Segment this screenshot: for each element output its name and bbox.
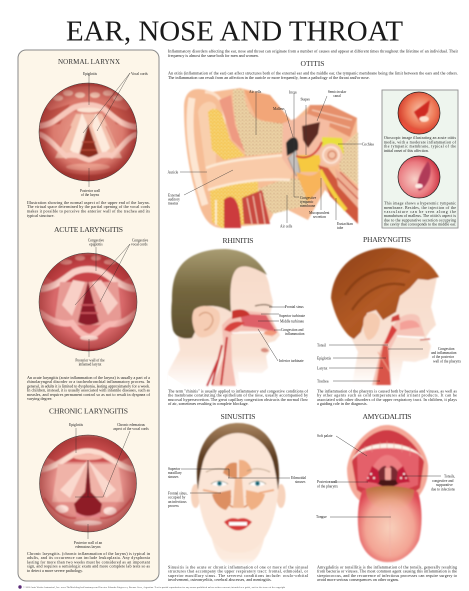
text: rhinitis: [168, 388, 309, 407]
text: pharyngitis: associated with other disorders of the upper respiratory tract. In children, it plays: [317, 397, 457, 403]
illustration: ear anatomy: Incus: [289, 90, 297, 94]
heading: rhinitis: RHINITIS: [222, 236, 254, 245]
text: hyperemic membrane image: [384, 202, 456, 227]
illustration: sinusitis face: sinuses: [295, 480, 306, 484]
illustration: mouth and tongue: Posterior wall: [317, 480, 337, 484]
footer copyright: © 2010 Amir Works Anatomical, Inc. www.TheModelingAndAnatomy.com Director: Eduardo Puigcerver, Buenos Aires, Argentina. Text in partial reproduction for any means prohibited unless written consent; intended as a guide, not for the teaser of the copyright: [23, 586, 285, 589]
text: chronic laryngitis: sign, and requires a semiologic exam and more complete lab tests so as: [27, 564, 150, 570]
illustration: acute laryngitis: [39, 238, 149, 366]
text: amygdalitis: from bacteria or viruses. The most common agent causing this inflammation is the: [317, 569, 457, 574]
illustration: acute laryngitis: epiglottis: [89, 242, 103, 246]
illustration: ear anatomy: Air cells: [280, 224, 293, 228]
text: rhinitis: mucosal hypersecretion. The great capillary congestion obstructs the normal flow: [168, 397, 308, 402]
fat: [208, 109, 245, 160]
eyes: [212, 481, 227, 486]
heading: pharyngitis: PHARYNGITIS: [363, 235, 411, 244]
text: amygdalitis: Amygdalitis or tonsillitis is the inflammation of the tonsils, generally resulting: [317, 564, 457, 570]
illustration: rhinitis head: Superior turbinate: [279, 314, 305, 318]
illustration: ear anatomy: [168, 88, 374, 230]
text: sinusitis: structures that accompany the upper respiratory tract: frontal, ethmoidal, or: [168, 569, 309, 575]
illustration: acute laryngitis: Congestive: [88, 238, 104, 242]
text: acute otitis image: [384, 136, 457, 153]
text: rhinitis: the membrane constituting the epithelium of the nose, usually accompanied by: [168, 393, 309, 399]
illustration: sinusitis face: process: [168, 504, 179, 508]
illustration: mouth and tongue: suppurative: [436, 483, 453, 487]
illustration: mouth and tongue: congestive and: [432, 479, 454, 483]
frontal sinuses: [223, 463, 237, 479]
text: hyperemic membrane image: This image shows a hyperemic tympanic: [384, 202, 456, 206]
illustration: sinusitis face: Frontal sinus,: [168, 492, 188, 496]
illustration: ear anatomy: meatus: [168, 202, 179, 206]
illustration: ear anatomy: External: [168, 194, 180, 198]
eustachian tube: [318, 165, 358, 224]
text: sinusitis: involvement, osteomyelitis, cerebral abscesses, and meningitis.: [168, 577, 272, 583]
illustration: sinusitis face: Superior: [168, 467, 181, 471]
illustration: chronic laryngitis: Chronic edematous: [117, 423, 146, 427]
illustration: mouth and tongue: [316, 425, 456, 562]
heading: acute laryngitis: ACUTE LARYNGITIS: [54, 225, 123, 234]
illustration: normal larynx: of the larynx: [81, 193, 99, 197]
cochlea: [320, 144, 342, 166]
leader lines: [180, 93, 362, 223]
illustration: ear anatomy: tube: [337, 226, 344, 230]
ear canal: [206, 155, 294, 190]
illustration: mouth and tongue: due to infections: [431, 487, 456, 491]
illustration: ear anatomy: Air cells: [249, 90, 262, 94]
panel: otoscopic images: [382, 90, 458, 228]
text: pharyngitis: [317, 388, 457, 406]
text: acute laryngitis: rhinolaryngeal disorder or a tracheobronchial inflammatory process. In: [27, 379, 150, 384]
illustration: mouth and tongue: Soft palate: [317, 434, 333, 438]
text: amygdalitis: avoid more serious consequences on other organs.: [317, 577, 399, 582]
text: otitis: The inflammation can result from an affection in the auricle or more frequently, from a pathology of the throat and/or nose.: [168, 75, 370, 81]
panel: laryngitis: [18, 50, 159, 581]
middle ear: [282, 114, 330, 178]
text: normal larynx: Illustration showing the normal aspect of the upper end of the larynx.: [27, 200, 150, 205]
text: acute laryngitis: varying degree.: [27, 396, 52, 401]
illustration: acute laryngitis: inflamed larynx: [79, 362, 102, 366]
title: EAR, NOSE AND THROAT: [66, 16, 403, 48]
illustration: ear anatomy: membrane: [300, 204, 316, 208]
illustration: ear anatomy: secretion: [313, 215, 326, 219]
illustration: acute laryngitis: vocal cords: [131, 242, 148, 246]
illustration: normal larynx: Epiglottis: [83, 72, 98, 76]
illustration: pharyngitis head: and inflammation: [431, 351, 457, 355]
text: hyperemic membrane image: manubrium of malleus. The otitis's aspect is: [384, 214, 456, 218]
illustration: sinusitis face: maxillary: [168, 471, 182, 475]
lips: [347, 425, 428, 506]
illustration: pharyngitis head: Larynx: [317, 366, 328, 370]
text: hyperemic membrane image: membrane. Besides, the injection of the: [384, 206, 456, 211]
text: pharyngitis: The inflammation of the pharynx is caused both by bacteria and viruses, as well as: [317, 388, 457, 394]
illustration: acute laryngitis: Posterior wall of the: [75, 358, 105, 362]
illustration: sinusitis face: occupied by: [168, 496, 186, 500]
illustration: pharyngitis head: wall of the pharynx: [433, 359, 461, 363]
illustration: sinusitis face: an infectious: [168, 500, 187, 504]
text: normal larynx: The virtual space determined by the partial opening of the vocal cords: [27, 204, 150, 209]
illustration: pharyngitis head: Tonsil: [317, 344, 326, 348]
heading: amygdalitis: AMYGDALITIS: [362, 412, 412, 421]
text: hyperemic membrane image: the cavity that corresponds to the middle ear.: [384, 223, 456, 227]
text: sinusitis: superior maxillary sinus. The severest conditions include: oculo-orbital: [168, 573, 309, 578]
illustration: pharyngitis head: Epiglottis: [317, 356, 332, 360]
illustration: ear anatomy: auditory: [168, 198, 180, 202]
text: acute laryngitis: In children, instead, it is usually associated with infantile diseases, such as: [27, 388, 150, 394]
illustration: ear anatomy: Mucopurulent: [309, 211, 329, 215]
heading: chronic laryngitis: CHRONIC LARYNGITIS: [49, 406, 128, 416]
text: acute laryngitis: general, in adults it is limited to dysphonia, lasting approximately for a week.: [27, 383, 150, 389]
text: hyperemic membrane image: vasculature can be seen along the: [384, 210, 456, 214]
text: sinusitis: [168, 564, 309, 583]
illustration: ear anatomy: Malleus: [273, 107, 285, 111]
text: otitis: [168, 70, 458, 81]
text: introduction: frequency is almost the same both for men and women.: [168, 53, 259, 58]
illustration: pharyngitis head: of the posterior: [432, 355, 455, 359]
spongy bone: [233, 89, 288, 156]
text: amygdalitis: streptococcus, and the recurrence of infectious processes can require surgery to: [317, 573, 457, 579]
skin base: [184, 88, 358, 228]
text: rhinitis: The term "rhinitis" is usually applied to inflammatory and congestive conditions of: [168, 388, 309, 394]
illustration: rhinitis head: Middle turbinate: [280, 320, 304, 324]
nasal cavity: [212, 311, 278, 386]
illustration: chronic laryngitis: Posterior wall of an: [74, 541, 102, 545]
white collar: [168, 375, 188, 388]
illustration: rhinitis head: Inferior turbinate: [279, 359, 304, 363]
text: hyperemic membrane image: due to the suppurative secretion occupying: [384, 218, 456, 222]
heading: normal larynx: NORMAL LARYNX: [58, 58, 120, 66]
text: acute laryngitis: An acute laryngitis (acute inflammation of the larynx) is usually a part of a: [27, 375, 150, 380]
text: normal larynx: [27, 200, 150, 218]
illustration: sinusitis face: [168, 423, 306, 566]
illustration: normal larynx: Vocal cords: [131, 72, 148, 76]
illustration: ear anatomy: Stapes: [300, 98, 310, 102]
text: acute otitis image: media, with a moderate inflammation of: [384, 140, 457, 145]
text: acute otitis image: the tympanic membrane, typical of the: [384, 145, 456, 150]
text: acute otitis image: initial onset of this affection.: [384, 149, 429, 153]
illustration: rhinitis head: Frontal sinus: [285, 305, 304, 309]
illustration: ear anatomy: Semicircular: [328, 90, 347, 94]
text: acute laryngitis: measles, and requires permanent control so as not to result in dyspnea of: [27, 392, 151, 398]
maxillary sinuses: [212, 490, 231, 510]
otoscopic image: acute otitis: [398, 92, 440, 136]
throat: [372, 314, 425, 385]
text: pharyngitis: by other agents such as cold temperatures and irritant products. It can be: [317, 393, 457, 398]
illustration: rhinitis head: Congestion and: [281, 328, 304, 332]
illustration: chronic laryngitis: Epiglottis: [69, 423, 84, 427]
illustration: sinusitis face: sinuses: [168, 475, 179, 479]
illustration: chronic laryngitis: edematous larynx: [75, 545, 101, 549]
illustration: mouth and tongue: Tongue: [316, 515, 327, 519]
text: normal larynx: typical structure.: [27, 213, 55, 218]
tongue: [358, 486, 422, 562]
text: pharyngitis: a guiding role in the diagnosis.: [317, 401, 367, 406]
text: chronic laryngitis: to detect a more severe pathology.: [27, 568, 83, 573]
text: chronic laryngitis: [27, 551, 151, 573]
illustration: rhinitis head: inflammation: [285, 332, 305, 336]
illustration: ear anatomy: Auricle: [168, 170, 179, 174]
illustration: mouth and tongue: Tonsils,: [444, 474, 455, 480]
text: chronic laryngitis: Chronic laryngitis. (chronic inflammation of the larynx) is typical in: [27, 551, 150, 556]
otoscopic image: hyperemic membrane: [398, 156, 440, 198]
illustration: ear anatomy: tympanic: [300, 200, 314, 204]
text: introduction: Inflammatory disorders affecting the ear, nose and throat can originate from a number of causes and appear at different times throughout the lifetime of an individual. Their: [168, 48, 459, 54]
illustration: sinusitis face: Ethmoidal: [291, 476, 306, 480]
illustration: chronic laryngitis: aspect of the vocal cords: [113, 427, 149, 431]
illustration: pharyngitis head: Congestion: [438, 347, 455, 351]
illustration: rhinitis head: [168, 249, 305, 388]
text: chronic laryngitis: lasting for more than two weeks must be considered as an important: [27, 559, 151, 564]
throat: [368, 455, 408, 484]
text: introduction: [168, 48, 459, 58]
text: rhinitis: of air, sometimes resulting in complete blockage.: [168, 401, 249, 407]
illustration: acute laryngitis: Congestive: [132, 238, 149, 242]
lips: [224, 518, 252, 530]
text: chronic laryngitis: adults, and its occurrence can include leukoplasia. Any dysphonia: [27, 555, 150, 561]
heading: sinusitis: SINUSITIS: [220, 412, 256, 421]
illustration: ear anatomy: Cochlea: [362, 142, 374, 146]
illustration: pharyngitis head: Trachea: [317, 380, 329, 384]
ethmoidal and nasal: [233, 478, 244, 508]
illustration: normal larynx: Posterior wall: [80, 189, 100, 193]
icon: publisher logo: [18, 585, 22, 589]
heading: otitis: OTITIS: [300, 59, 324, 68]
text: normal larynx: makes it possible to perceive the anterior wall of the trachea and its: [27, 208, 150, 214]
illustration: ear anatomy: Congestive: [300, 196, 317, 200]
illustration: chronic laryngitis: [39, 423, 149, 549]
illustration: ear anatomy: canal: [333, 94, 341, 98]
text: acute laryngitis: [27, 375, 151, 401]
illustration: pharyngitis head: [317, 248, 461, 385]
text: amygdalitis: [317, 564, 457, 582]
illustration: normal larynx: [39, 72, 148, 197]
text: acute otitis image: Otoscopic image illustrating an acute otitis: [384, 136, 456, 140]
illustration: ear anatomy: Eustachian: [337, 222, 353, 226]
palate: [357, 444, 419, 490]
text: otitis: An otitis (inflammation of the ear) can affect structures both of the external ear and the middle ear, the tympanic membrane being the limit between the ears and the others.: [168, 70, 458, 76]
text: sinusitis: Sinusitis is the acute or chronic inflammation of one or more of the sinusal: [168, 564, 309, 570]
illustration: mouth and tongue: of the pharynx: [317, 484, 338, 488]
muscles: [224, 197, 241, 228]
